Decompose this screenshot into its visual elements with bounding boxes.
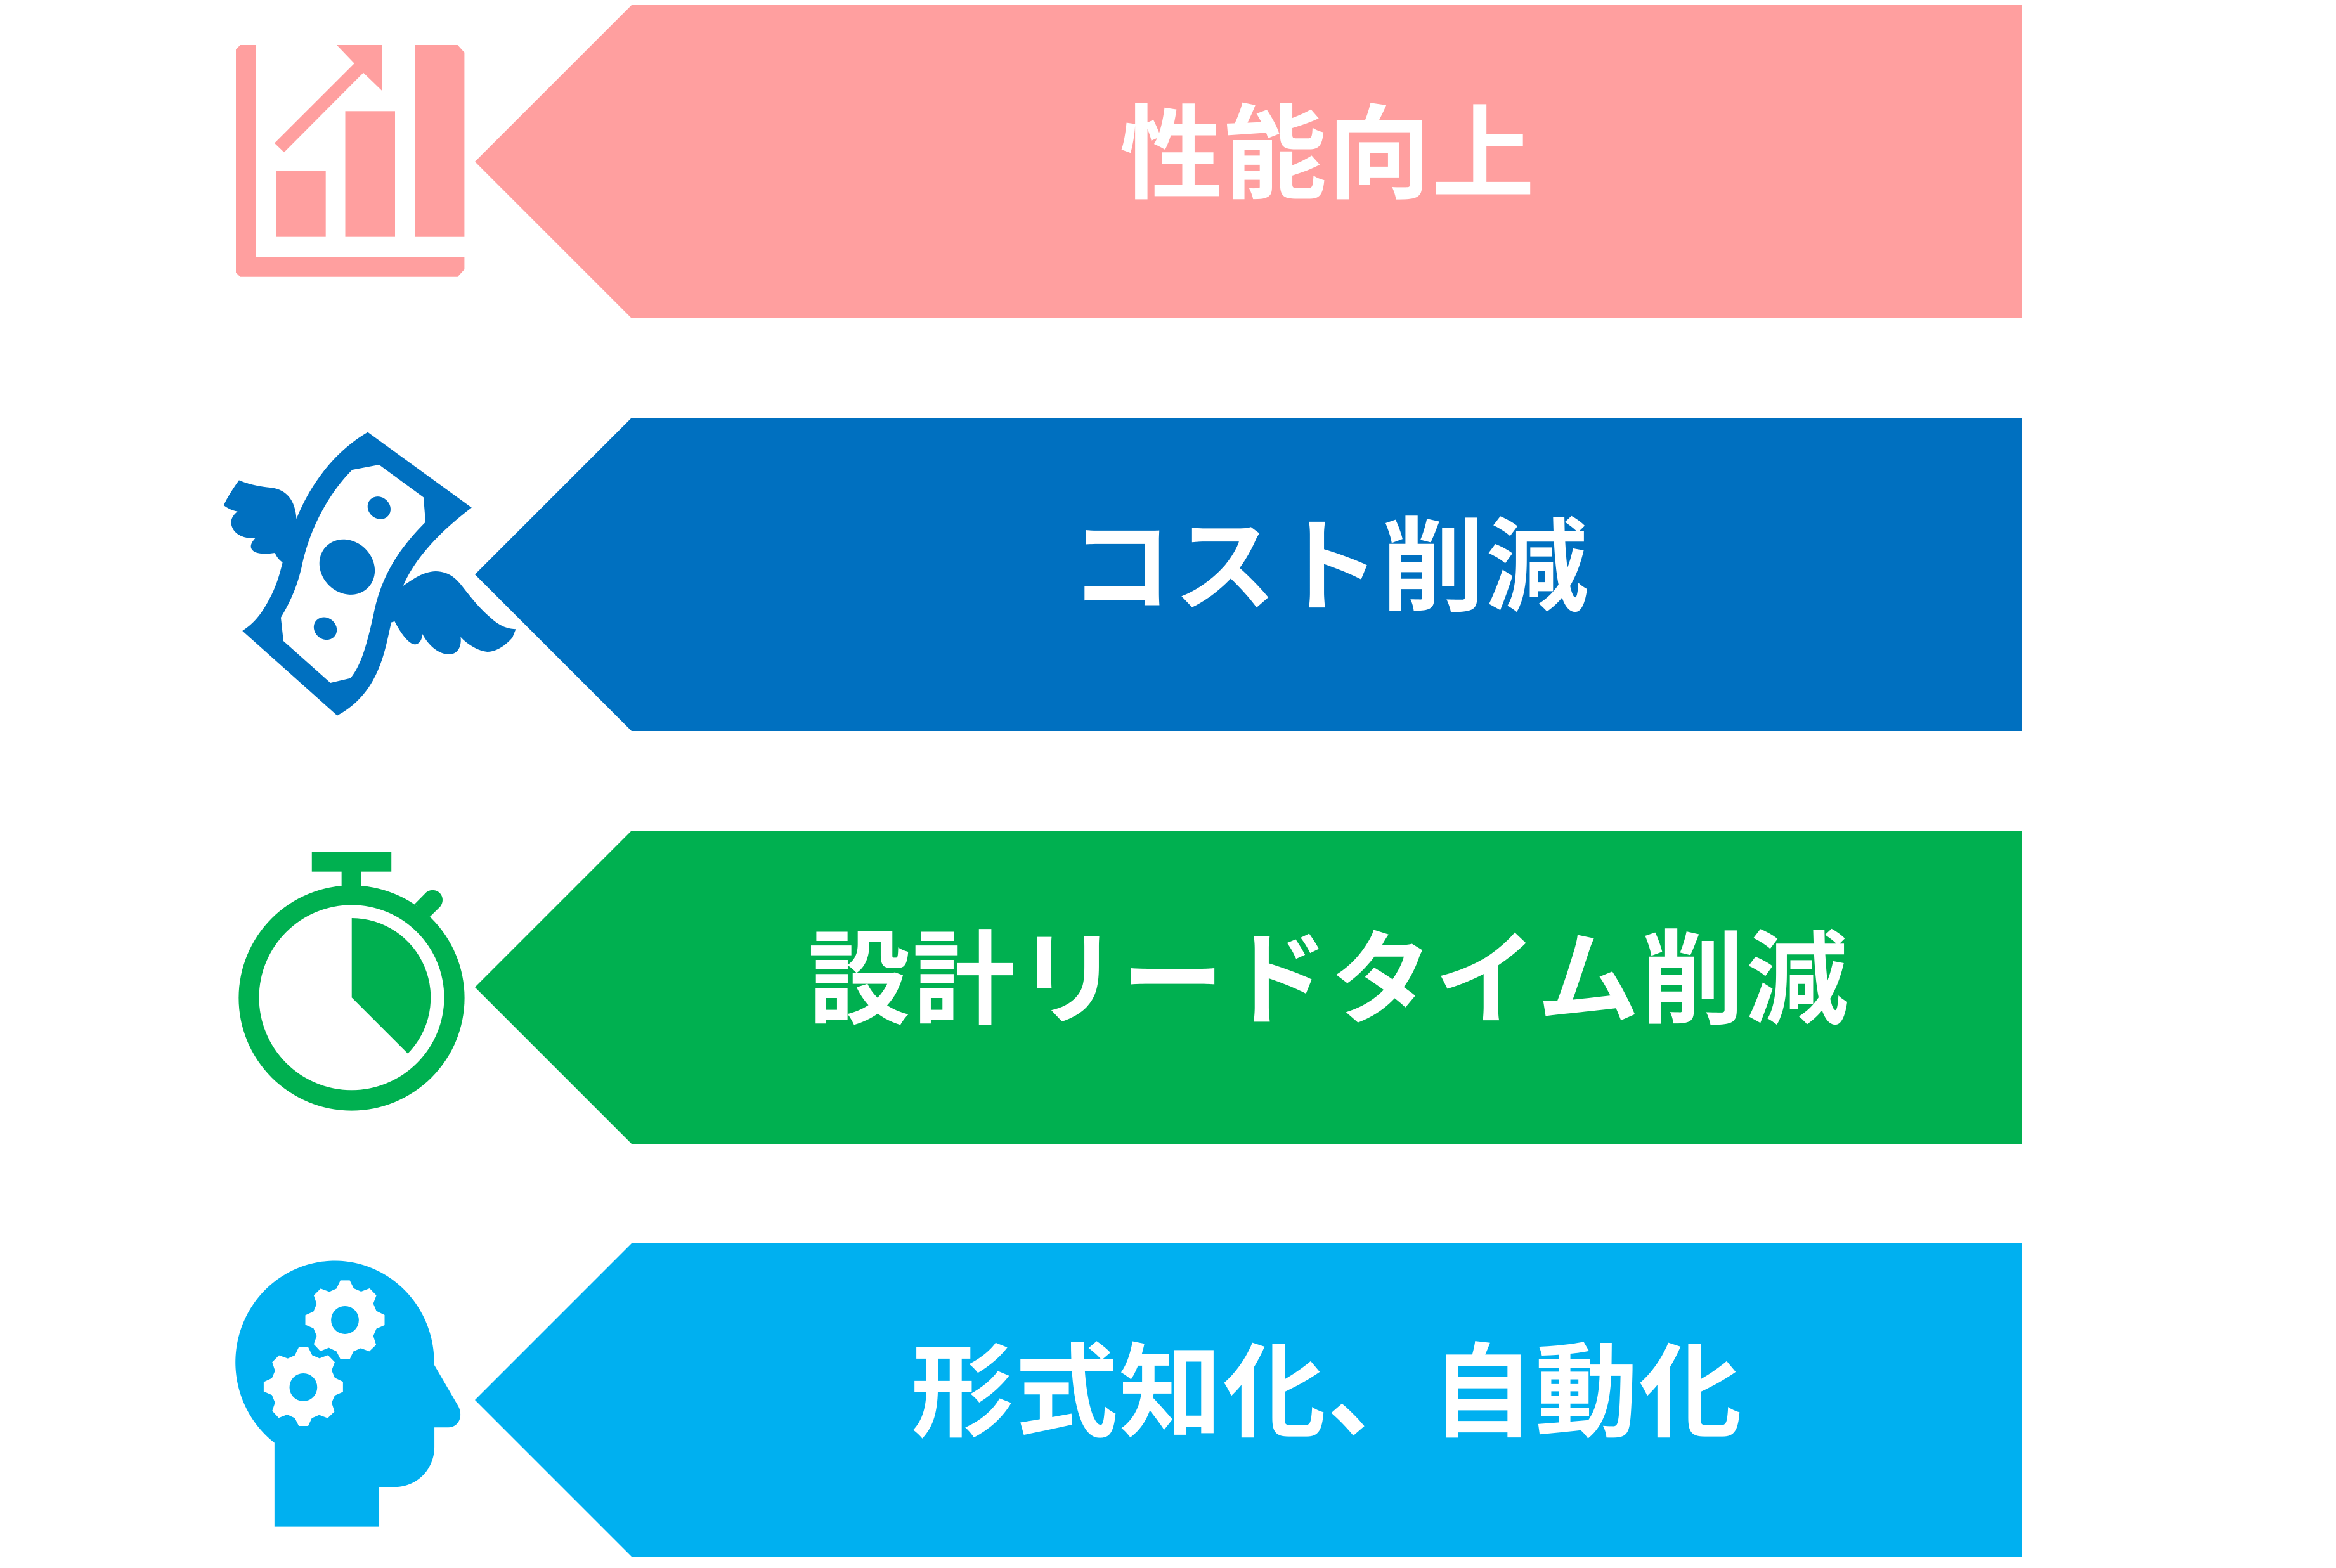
icon: head with gears <box>235 1260 460 1527</box>
row: cost reduction <box>224 418 2022 731</box>
icon: flying banknote <box>224 432 516 716</box>
icon: stopwatch <box>238 852 465 1111</box>
arrow banner: light blue <box>475 1243 2022 1557</box>
arrow banner: green <box>475 831 2022 1144</box>
label: 性能向上: 性能向上 <box>1120 98 1536 212</box>
row: design lead time reduction <box>238 831 2022 1144</box>
label: 設計リードタイム削減: 設計リードタイム削減 <box>808 923 1850 1038</box>
row: codifying knowledge and automation <box>235 1243 2022 1557</box>
label: コスト削減: コスト削減 <box>1070 510 1590 625</box>
row: performance improvement <box>236 5 2022 318</box>
arrow banner: pink <box>475 5 2022 318</box>
label: 形式知化、自動化: 形式知化、自動化 <box>911 1336 1743 1451</box>
icon: rising bar chart <box>236 45 464 277</box>
arrow banner: blue <box>475 418 2022 731</box>
